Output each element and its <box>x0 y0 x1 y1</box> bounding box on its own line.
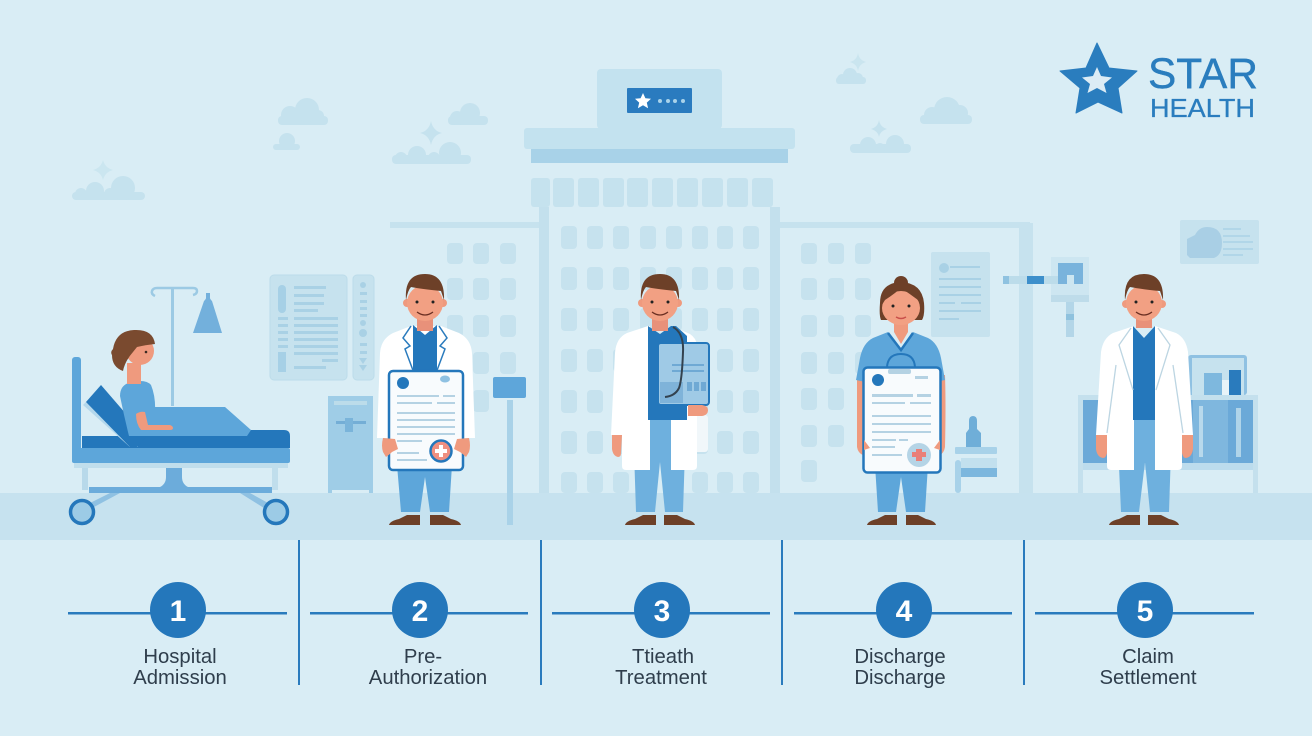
label: Settlement <box>1100 667 1197 689</box>
label: Authorization <box>369 667 487 689</box>
head <box>403 274 447 331</box>
scrub <box>1133 326 1155 420</box>
blanket <box>129 407 251 436</box>
label: Treatment <box>615 667 707 689</box>
step 4 <box>794 582 1012 689</box>
doctor with document <box>377 274 475 525</box>
step 5 <box>1035 582 1254 689</box>
label: Hospital <box>143 646 217 668</box>
label: Admission <box>133 667 227 689</box>
background clouds <box>72 53 972 200</box>
number badge 1 <box>150 582 206 638</box>
tablet <box>658 343 709 405</box>
lab coat left panel <box>611 326 650 470</box>
number badge 3 <box>634 582 690 638</box>
doctor with tablet and stethoscope <box>611 274 709 525</box>
number badge 5: 5 <box>1137 595 1153 628</box>
IV pole <box>152 288 222 406</box>
number badge 5 <box>1117 582 1173 638</box>
number badge 2 <box>392 582 448 638</box>
floor <box>0 493 1312 540</box>
lab coat <box>377 326 475 470</box>
wall poster: document right <box>931 252 990 337</box>
icon: star <box>1060 43 1137 113</box>
hand right <box>688 405 708 416</box>
wheels <box>70 500 288 524</box>
shoes <box>867 515 936 525</box>
pants <box>397 465 452 512</box>
nurse cart <box>955 416 997 493</box>
number badge 2: 2 <box>412 595 428 628</box>
document clipboard <box>382 371 470 470</box>
patient in hospital bed <box>70 288 290 524</box>
document clipboard <box>864 368 940 472</box>
step 1 <box>68 582 287 689</box>
number badge 4 <box>876 582 932 638</box>
step 2 <box>310 582 528 689</box>
patient head <box>111 330 155 384</box>
hospital building <box>390 69 1033 493</box>
arms <box>857 375 946 455</box>
shoes <box>625 515 695 525</box>
equipment cabinet <box>328 396 373 493</box>
wall poster: chart left <box>270 275 374 380</box>
number badge 3: 3 <box>654 595 670 628</box>
lab coat right panel <box>1155 326 1193 470</box>
logo <box>1060 43 1258 123</box>
patient arm <box>136 412 173 430</box>
shoes <box>389 515 461 525</box>
medical wall arm <box>1003 257 1089 337</box>
shoes <box>1109 515 1179 525</box>
hands <box>1096 435 1193 458</box>
label: Discharge <box>854 667 946 689</box>
scrub top <box>856 332 945 383</box>
hand left <box>612 435 622 457</box>
head <box>638 274 682 331</box>
backrest <box>83 402 138 447</box>
number badge 4: 4 <box>896 595 913 628</box>
step 3 <box>552 582 770 689</box>
scrub <box>413 325 437 375</box>
logo text STAR: STAR <box>1148 50 1258 98</box>
logo text HEALTH: HEALTH <box>1150 93 1255 123</box>
scrub <box>648 326 687 420</box>
coat back panel <box>694 415 708 452</box>
label: Pre- <box>404 646 442 668</box>
stethoscope <box>665 327 683 397</box>
pants <box>875 465 928 512</box>
pants <box>633 420 686 512</box>
lab table and monitor <box>1078 355 1258 493</box>
patient gown <box>120 381 155 436</box>
IV stand <box>493 377 526 525</box>
head <box>880 276 924 344</box>
doctor in lab coat <box>1096 274 1193 525</box>
label: Claim <box>1122 646 1174 668</box>
lab coat left panel <box>1096 326 1134 470</box>
lab coat right panel <box>671 326 697 470</box>
label: Ttieath <box>632 646 694 668</box>
pants <box>1117 420 1172 512</box>
head <box>1122 274 1166 328</box>
nurse with document <box>856 276 946 525</box>
label: Discharge <box>854 646 946 668</box>
wall poster: top right <box>1180 220 1259 264</box>
hospital sign <box>627 88 692 113</box>
number badge 1: 1 <box>170 595 186 628</box>
bed frame <box>72 357 290 508</box>
step dividers <box>298 540 1025 685</box>
